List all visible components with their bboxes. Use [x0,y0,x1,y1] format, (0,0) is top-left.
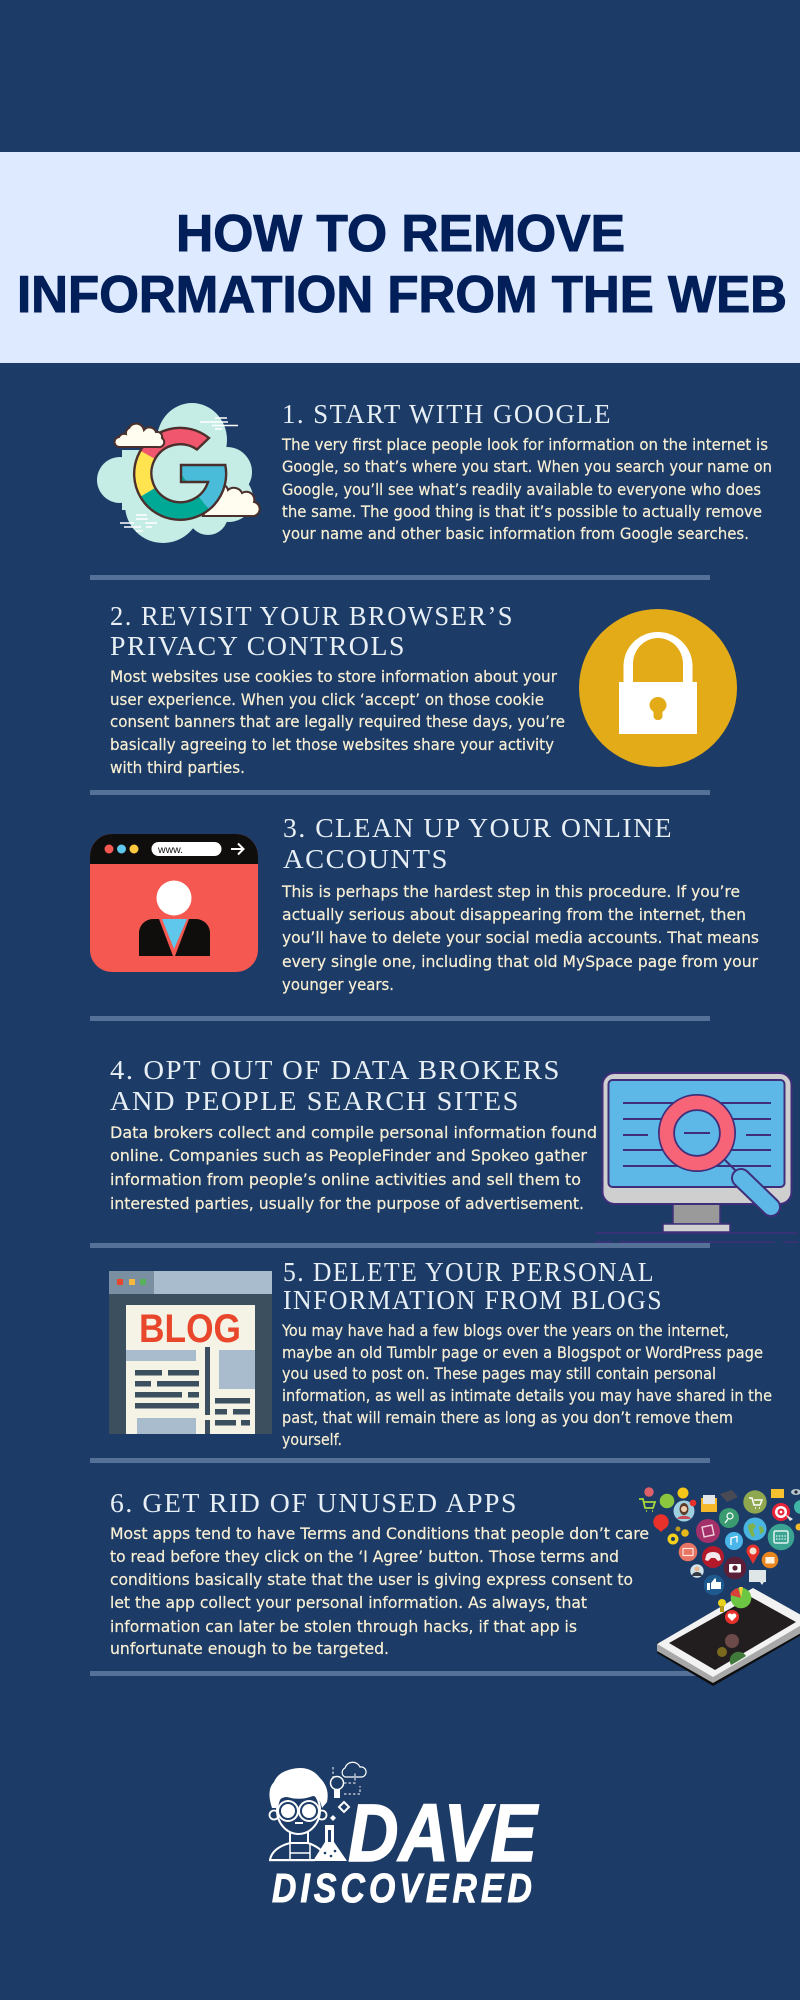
heading: step 5 [283,1257,663,1315]
panel: step 3 online accounts [90,813,759,994]
heading: step 5: 5. DELETE YOUR PERSONAL [283,1257,655,1287]
icon: padlock [579,609,737,767]
text block: step 5 [281,1321,772,1449]
text block: step 6: to read before they click on the ‘I Agree’ button. Those terms and [110,1547,619,1566]
text block: step 6 [110,1524,649,1658]
text block: step 5: you used to post on. These pages may still contain personal [282,1364,716,1383]
wordmark: DISCOVERED [272,1865,536,1911]
heading: step 4: 4. OPT OUT OF DATA BROKERS [110,1055,561,1085]
icon: monitor with magnifier [595,1073,798,1242]
heading: step 2: PRIVACY CONTROLS [110,631,406,661]
text block: step 2: consent banners that are legally required these days, you’re [110,712,565,731]
panel: step 5 blogs [109,1257,772,1449]
title [17,205,787,324]
title: HOW TO REMOVE [176,205,625,263]
text block: step 5: You may have had a few blogs over the years on the internet, [281,1321,729,1340]
heading: step 4 [110,1055,561,1116]
text block: step 3 [281,882,759,994]
icon: phone with floating app icons [639,1487,800,1686]
heading: step 3 [283,813,673,874]
text block: step 2: basically agreeing to let those websites share your activity [110,735,554,754]
text block: step 6: conditions basically state that the user is giving express consent to [110,1570,633,1589]
text block: step 6: unfortunate enough to be targeted. [110,1639,389,1658]
icon: blog page: BLOG [139,1307,241,1351]
text block: step 4: online. Companies such as PeopleFinder and Spokeo gather [110,1146,587,1165]
wordmark [272,1788,539,1911]
text block: step 1: your name and other basic information from Google searches. [282,524,749,543]
text block: step 1: Google, so that’s where you start. When you search your name on [282,457,772,476]
text block: step 2: user experience. When you click ‘accept’ on those cookie [110,690,544,709]
text block: step 6: information can later be stolen through hacks, if that app is [110,1617,577,1636]
title: INFORMATION FROM THE WEB [17,266,787,324]
panel: step 4 data brokers [110,1055,798,1242]
icon: smartphone [657,1588,800,1686]
heading: step 4: AND PEOPLE SEARCH SITES [110,1086,520,1116]
text block: step 1: Google, you’ll see what’s readily available to everyone who does [282,480,761,499]
heading: step 3: 3. CLEAN UP YOUR ONLINE [283,813,673,843]
title banner [0,152,800,363]
text block: step 2 [110,667,565,777]
icon: scientist mascot [269,1762,366,1861]
text block: step 2: with third parties. [110,758,245,777]
text block: step 6: Most apps tend to have Terms and Conditions that people don’t care [110,1524,649,1543]
text block: step 5: yourself. [282,1430,342,1449]
text block: step 1: the same. The good thing is that it’s possible to actually remove [282,502,762,521]
text block: step 2: Most websites use cookies to store information about your [110,667,557,686]
panel: step 6 unused apps [110,1488,649,1658]
text block: step 6: let the app collect your personal information. As always, that [110,1593,587,1612]
text block: step 5: maybe an old Tumblr page or even a Blogspot or WordPress page [282,1343,763,1362]
text block: step 4: interested parties, usually for the purpose of advertisement. [110,1194,584,1213]
panel: step 1 start with Google [97,399,772,548]
text block: step 3: actually serious about disappearing from the internet, then [282,905,746,924]
icon: browser window with user [90,834,258,972]
heading: step 2: 2. REVISIT YOUR BROWSER’S [110,601,514,631]
wordmark: DAVE [348,1788,539,1879]
panel: step 2 browser privacy controls [110,601,737,777]
text block: step 3: you’ll have to delete your social media accounts. That means [282,928,759,947]
text block: step 1: The very first place people look for information on the internet is [281,435,768,454]
icon: blog page [109,1271,272,1434]
text block: step 4: information from people’s online activities and sell them to [110,1170,581,1189]
text block: step 4: Data brokers collect and compile personal information found [110,1123,597,1142]
icons: app bubbles [639,1487,800,1624]
heading: step 2 [110,601,514,661]
icon: browser window with user: www. [157,844,183,856]
text block: step 1 [281,435,772,543]
heading: step 1: 1. START WITH GOOGLE [282,399,612,429]
text block: step 3: younger years. [282,975,394,994]
heading: step 3: ACCOUNTS [283,844,449,874]
heading: step 6: 6. GET RID OF UNUSED APPS [110,1488,518,1518]
text block: step 3: every single one, including that old MySpace page from your [282,952,758,971]
text block: step 5: past, that will remain there as long as you don’t remove them [282,1408,733,1427]
text block: step 4 [110,1123,597,1213]
icon: Google G on cloud [97,403,260,548]
heading: step 5: INFORMATION FROM BLOGS [283,1285,663,1315]
text block: step 3: This is perhaps the hardest step in this procedure. If you’re [281,882,740,901]
logo: Dave Discovered [269,1762,539,1911]
